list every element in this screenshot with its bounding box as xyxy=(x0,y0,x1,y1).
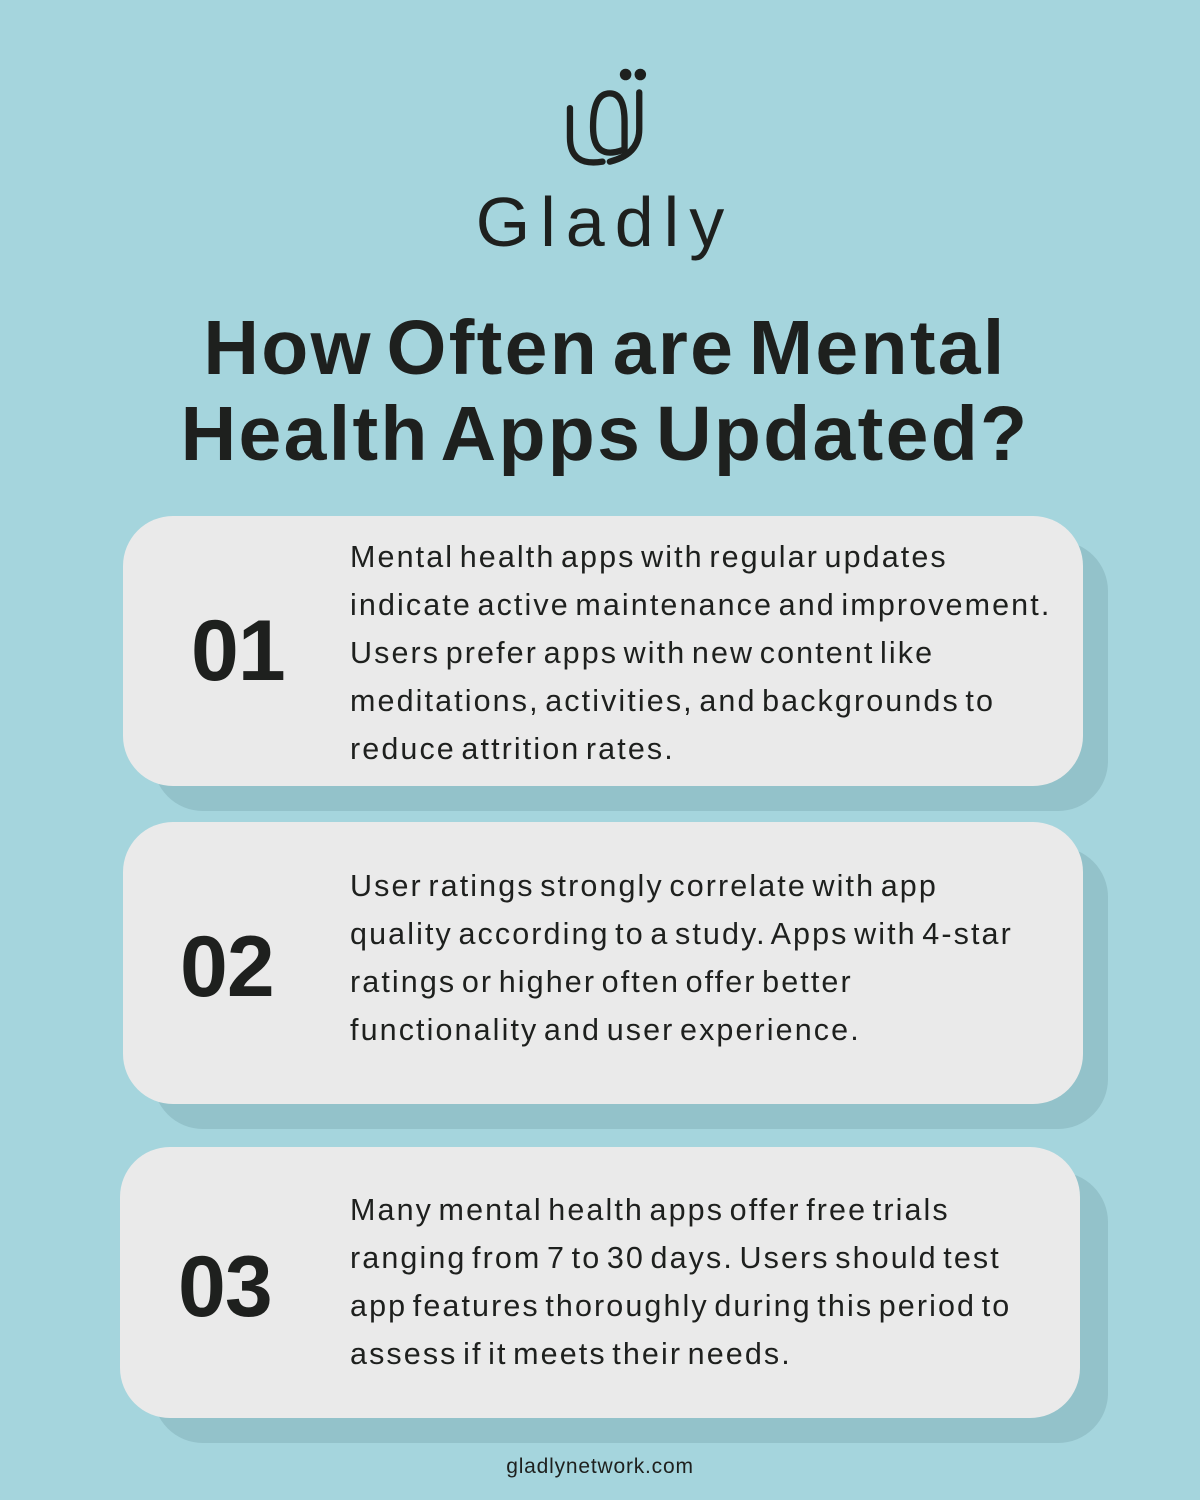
panel: item 01 xyxy=(123,516,1108,811)
text 01: meditations, activities, and backgrounds to xyxy=(350,684,995,718)
text 01: Mental health apps with regular updates xyxy=(350,540,948,574)
text 02: ratings or higher often offer better xyxy=(350,965,853,999)
title: Health Apps Updated? xyxy=(181,391,1029,477)
logo icon xyxy=(566,68,646,166)
text 02: User ratings strongly correlate with app xyxy=(350,869,938,903)
panel: item 02 xyxy=(123,822,1108,1129)
number 02: 02 xyxy=(180,919,274,1015)
panel: item 03 xyxy=(120,1147,1108,1443)
text 03: app features thoroughly during this period to xyxy=(350,1289,1011,1323)
brand name: Gladly xyxy=(476,183,734,261)
text 01: Users prefer apps with new content like xyxy=(350,636,934,670)
number 03: 03 xyxy=(178,1239,272,1335)
text 02 xyxy=(350,869,1013,1047)
text 03 xyxy=(350,1193,1011,1371)
title: How Often are Mental xyxy=(203,305,1007,391)
title xyxy=(181,305,1029,477)
text 03: Many mental health apps offer free trials xyxy=(350,1193,950,1227)
text 01: reduce attrition rates. xyxy=(350,732,675,766)
number 01: 01 xyxy=(191,603,285,699)
text 01 xyxy=(350,540,1051,766)
text 02: functionality and user experience. xyxy=(350,1013,861,1047)
text 02: quality according to a study. Apps with 4-star xyxy=(350,917,1013,951)
text 03: assess if it meets their needs. xyxy=(350,1337,792,1371)
footer url: gladlynetwork.com xyxy=(506,1455,694,1478)
text 01: indicate active maintenance and improvement. xyxy=(350,588,1051,622)
text 03: ranging from 7 to 30 days. Users should test xyxy=(350,1241,1001,1275)
